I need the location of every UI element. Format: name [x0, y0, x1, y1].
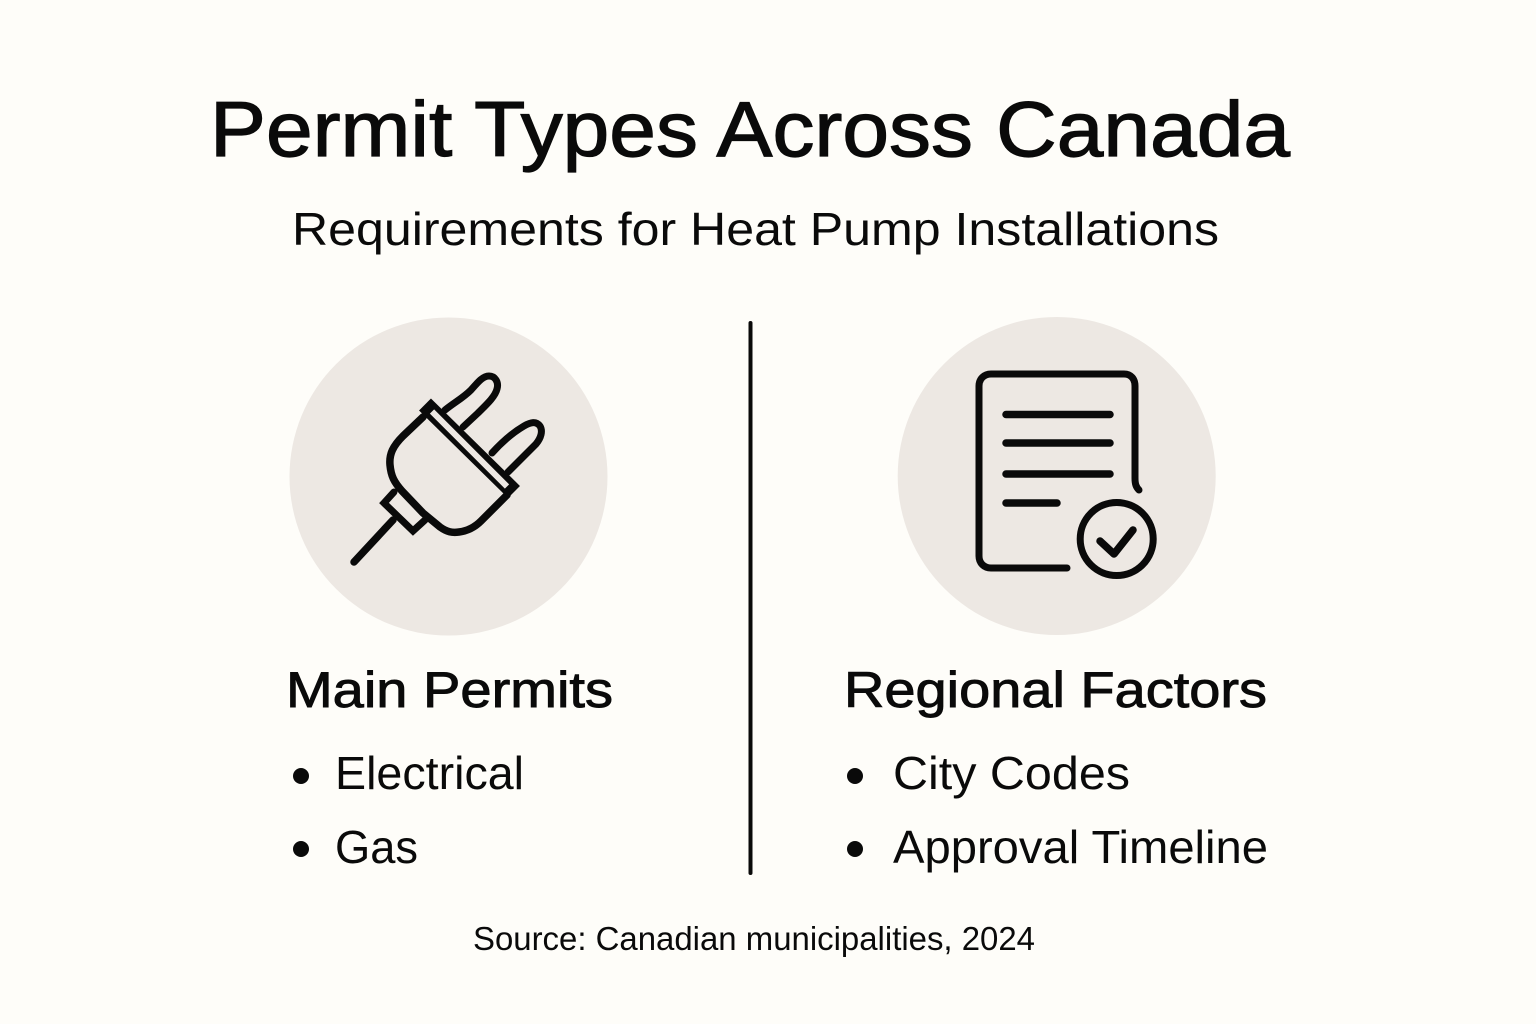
list: regional factors: Approval Timeline [893, 821, 1268, 873]
list: main permits: Electrical [335, 747, 524, 799]
heading: regional factors: Regional Factors [844, 662, 1267, 718]
title: Permit Types Across Canada [210, 85, 1291, 173]
icon: document with check in circle [898, 317, 1216, 635]
divider [748, 323, 752, 873]
list: regional factors [847, 747, 1268, 873]
heading: main permits: Main Permits [286, 662, 613, 718]
icon: electrical plug in circle [290, 318, 608, 636]
list: main permits: Gas [335, 821, 418, 873]
source note: Source: Canadian municipalities, 2024 [473, 920, 1035, 957]
panel: regional factors [844, 317, 1268, 873]
list: main permits [293, 747, 524, 873]
list: regional factors: City Codes [893, 747, 1130, 799]
subtitle: Requirements for Heat Pump Installations [292, 203, 1219, 255]
panel: main permits [286, 318, 613, 873]
